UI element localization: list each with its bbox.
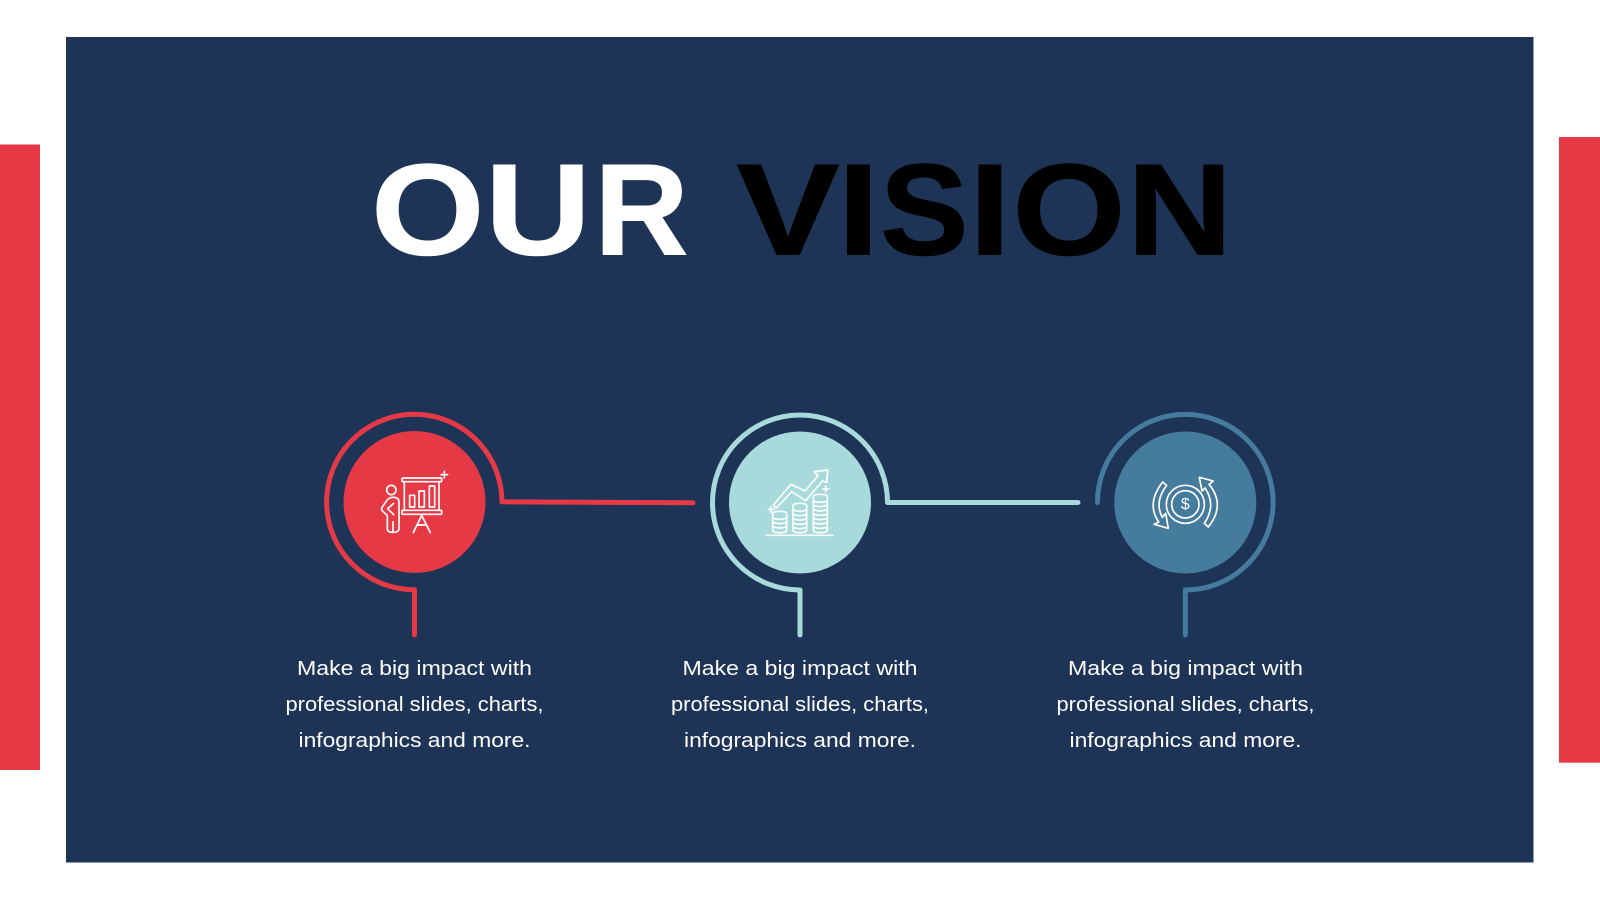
step 2: text: infographics and more. bbox=[684, 729, 916, 752]
title: O bbox=[1012, 136, 1126, 282]
icon: presenter with chart board bbox=[382, 471, 448, 533]
step 3: blue ring bbox=[1097, 414, 1273, 635]
step 2: aqua circle bbox=[729, 432, 871, 574]
icon: dollar coin with circular arrows bbox=[1153, 477, 1217, 528]
step 1: red ring with connector bbox=[327, 414, 693, 635]
title: I bbox=[969, 136, 1011, 282]
right red bar bbox=[1559, 137, 1600, 763]
left red bar bbox=[0, 144, 40, 770]
icon: coin stacks with rising arrow bbox=[767, 470, 833, 535]
step 1: text: Make a big impact with bbox=[297, 657, 532, 680]
step 3: text: professional slides, charts, bbox=[1056, 693, 1314, 716]
step 2: text: professional slides, charts, bbox=[671, 693, 929, 716]
step 3: text: Make a big impact with bbox=[1068, 657, 1303, 680]
step 1: text: infographics and more. bbox=[298, 729, 530, 752]
step 1: text: professional slides, charts, bbox=[286, 693, 544, 716]
icon: dollar sign: $ bbox=[1181, 496, 1190, 513]
step 2: text bbox=[671, 657, 929, 752]
title: N bbox=[1127, 136, 1232, 282]
title: S bbox=[880, 136, 968, 282]
step 2: text: Make a big impact with bbox=[682, 657, 918, 680]
step 1: text bbox=[286, 657, 544, 752]
title bbox=[371, 136, 1232, 282]
step 3: text bbox=[1056, 657, 1314, 752]
step 3: text: infographics and more. bbox=[1070, 729, 1302, 752]
title: V bbox=[736, 136, 840, 282]
step 1: red circle bbox=[344, 431, 486, 573]
title: O bbox=[371, 136, 484, 282]
title: I bbox=[838, 136, 879, 282]
step 3: blue circle bbox=[1114, 432, 1256, 574]
title: R bbox=[594, 136, 688, 282]
title: U bbox=[485, 136, 591, 282]
step 2: aqua ring with connector bbox=[712, 415, 1078, 635]
